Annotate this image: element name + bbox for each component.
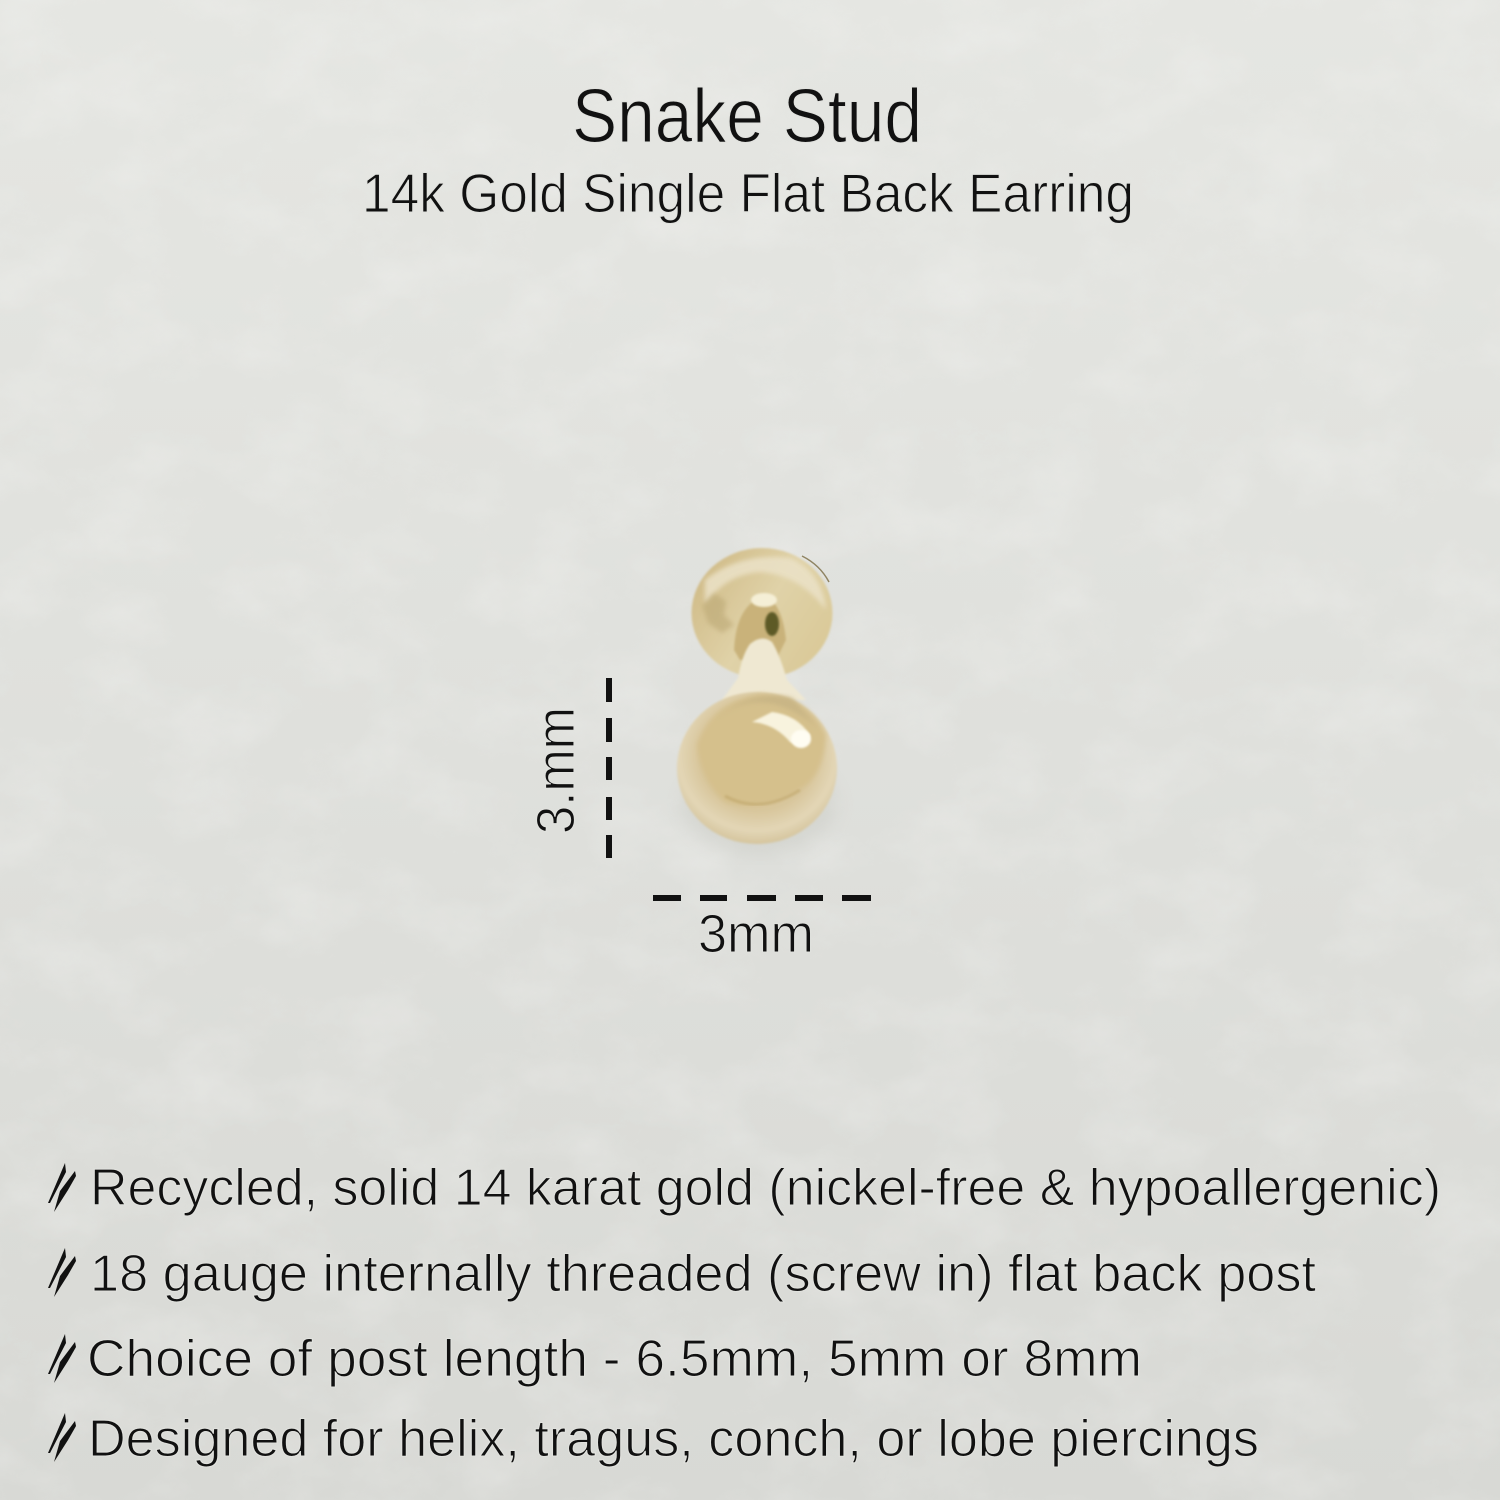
- post base and thread opening: [734, 593, 786, 660]
- gold ball: [677, 692, 837, 844]
- feature list: [48, 1159, 1441, 1468]
- title: Snake Stud: [572, 74, 922, 159]
- bullet 1: [48, 1159, 1441, 1217]
- width dimension line: [653, 895, 871, 901]
- bullet text: 18 gauge internally threaded (screw in) flat back post: [90, 1245, 1317, 1303]
- bullet text: Designed for helix, tragus, conch, or lobe piercings: [88, 1410, 1259, 1468]
- bullet 4: [48, 1410, 1259, 1468]
- width label: 3mm: [698, 904, 814, 964]
- bullet mark: [48, 1248, 76, 1297]
- bullet mark: [48, 1413, 76, 1462]
- bullet text: Recycled, solid 14 karat gold (nickel-free & hypoallergenic): [90, 1159, 1441, 1217]
- bullet mark: [48, 1163, 76, 1212]
- pale post: [722, 638, 806, 700]
- subtitle: 14k Gold Single Flat Back Earring: [362, 162, 1134, 224]
- soft shadow: [682, 755, 838, 855]
- height label: 3.mm: [526, 707, 586, 834]
- bullet 2: [48, 1245, 1317, 1303]
- flat back disc: [692, 548, 832, 678]
- product photo: gold flat back stud earring: [677, 548, 838, 855]
- bullet 3: [48, 1330, 1142, 1388]
- height dimension line: [606, 678, 612, 858]
- bullet mark: [48, 1334, 76, 1383]
- bullet text: Choice of post length - 6.5mm, 5mm or 8mm: [87, 1330, 1142, 1388]
